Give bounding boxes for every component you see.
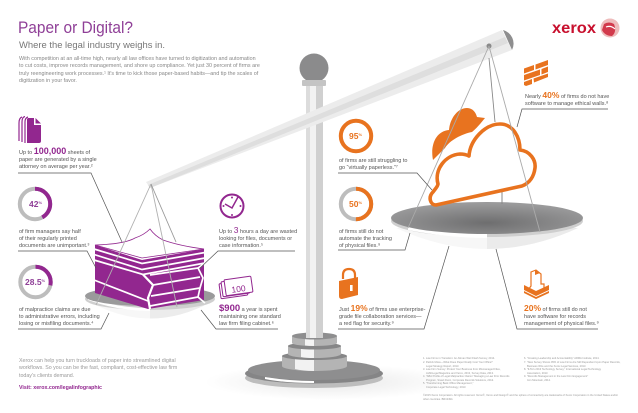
stat: firm managers: of their regularly printed [19, 236, 77, 242]
footnotes column two: Association, 2013. [527, 371, 548, 375]
intro text [19, 56, 260, 84]
stat: malpractice: of malpractice claims are due [19, 307, 91, 313]
intro text: With competition at an all-time high, nearly all law offices have turned to digitization and automation [19, 56, 256, 62]
callout lines [18, 109, 608, 329]
footnotes column one: ALM/Legal Magazine and Xerox, 2013, Survey Data, 2013. [426, 371, 494, 375]
footnotes column one: 4. "ABA Profile of Legal Malpractice Claims" Managing a Law Firm Records [423, 374, 510, 378]
stat: 900 dollars: maintaining one standard [219, 314, 281, 320]
stat: virtually paperless: go “virtually paperless.”⁷ [339, 164, 398, 171]
intro text: truly reengineering work processes.¹ It's time to kick those paper-based habits—and tip the scales of [19, 71, 259, 77]
donut: 28.5 percent: % [42, 278, 46, 283]
stat: malpractice [19, 307, 100, 327]
stat: 900 dollars: $900 a year is spent [219, 303, 278, 314]
footnotes column one: 3. Law Firm Survey: Protect Your Business from Mismanaged Files, [423, 367, 501, 371]
donut: 42 percent: 42 [29, 199, 38, 209]
intro text: to cut costs, improve records management, and shore up compliance. Yet just 30 percent of firms are [19, 63, 260, 69]
stat: 100,000 sheets [19, 146, 97, 170]
footnotes column one: Program, Stuart Dunn, Corporate Records Solutions, 2012. [426, 378, 494, 382]
donut: 42 percent: % [38, 200, 42, 205]
icon: lock [339, 269, 358, 299]
icon: money: 100 [231, 283, 246, 295]
stat: virtually paperless: of firms are still struggling to [339, 158, 407, 164]
donut: 50 percent: 50 [349, 199, 358, 209]
icon: money [219, 276, 253, 299]
donut: 28.5 percent: 28.5 [25, 277, 42, 287]
stat: 3 hours [219, 225, 297, 249]
footnotes column two: 8. "ILTA's 2013 Technology Survey," International Legal Technology [524, 367, 602, 371]
stat: 100,000 sheets: Up to 100,000 sheets of [19, 146, 91, 156]
floor shadow [205, 364, 455, 400]
stat: 20 percent: have software for records [524, 314, 586, 320]
donut: 28.5 percent [20, 267, 51, 297]
stat: 100,000 sheets: paper are generated by a single [19, 157, 97, 163]
stat: 19 percent: a red flag for security.⁹ [339, 320, 394, 327]
title: Paper or Digital? [18, 18, 133, 37]
icon: brick wall [524, 60, 548, 86]
footnotes column one: 2. Patrick Moss—What Does Paper Really Cost Your Office? [423, 360, 493, 364]
xerox logo [552, 18, 620, 38]
right pan strings [408, 46, 540, 232]
closing text: Xerox can help you turn truckloads of paper into streamlined digital [19, 358, 176, 364]
stat: 40 percent: software to manage ethical walls.⁸ [525, 100, 608, 107]
stat: 100,000 sheets: attorney on average per year.² [19, 164, 93, 170]
post [306, 84, 323, 338]
stat: 40 percent: Nearly 40% of firms do not have [525, 90, 609, 100]
footnotes column one: Corporate Legal Technology, 2013. [426, 385, 466, 389]
stat: 19 percent: grade file collaboration services— [339, 314, 422, 320]
footnotes column two: 9. "Records Management in the Law Firm Engagement" [524, 374, 588, 378]
stat: 3 hours: case information.⁵ [219, 242, 263, 249]
donut: 50 percent [341, 189, 371, 219]
xerox logo: xerox [552, 20, 596, 37]
stat: malpractice: to administrative errors, including [19, 314, 100, 320]
footnotes column two: 6. "Creating Leadership and Accountability" ARMA Institute, 2014. [524, 356, 600, 360]
icon: documents [19, 116, 41, 143]
stat: physical files tracking [339, 229, 392, 249]
stat: firm managers: documents are unimportant.³ [19, 243, 89, 249]
stat: 20 percent [524, 303, 599, 327]
stat: physical files tracking: of firms still do not [339, 229, 384, 235]
donut: 95 percent: % [358, 132, 362, 137]
base plate [245, 360, 383, 388]
icon: clock [220, 194, 244, 218]
link: Visit: xerox.com/legalinfographic [19, 385, 102, 391]
left pan strings [96, 184, 177, 307]
footnotes column two [524, 356, 621, 382]
stat: virtually paperless [339, 158, 407, 171]
footnotes column two: 7. "New Survey Shows 95% of Law Firms Are Still Dependent Upon Paper Records, [524, 360, 621, 364]
left pan [85, 290, 215, 318]
footnotes column two: Iron Mountain, 2012. [527, 378, 551, 382]
stat: physical files tracking: of physical files.⁹ [339, 242, 380, 249]
right pan [391, 202, 583, 249]
footnotes column one: 5. "Transforming Back Office Management," [423, 381, 474, 385]
closing text: today's clients demand. [19, 373, 74, 379]
closing text: workflows. So you can be the fast, compliant, cost-effective law firm [19, 365, 178, 371]
donut: 50 percent: % [358, 200, 362, 205]
stat: malpractice: losing or misfiling documents.⁴ [19, 320, 94, 327]
donut: 95 percent [341, 121, 371, 151]
stat: 900 dollars [219, 303, 281, 327]
stat: 3 hours: Up to 3 hours a day are wasted [219, 225, 297, 235]
stat: firm managers [19, 229, 89, 249]
stat: 900 dollars: law firm filing cabinet.⁶ [219, 320, 274, 327]
footnotes column one: 1. Law Firms in Transition: An Altman Weil Flash Survey, 2014. [423, 356, 495, 360]
top tier [292, 332, 337, 346]
paper stack icon [94, 229, 205, 309]
stat: 40 percent [525, 90, 609, 107]
copyright: other countries. BR13494. [423, 397, 453, 401]
stat: firm managers: of firm managers say half [19, 229, 81, 235]
footnotes column one: Legal Strategy Report, 2013. [426, 364, 459, 368]
stat: 19 percent [339, 303, 426, 327]
subtitle: Where the legal industry weighs in. [19, 40, 165, 51]
stat: 20 percent: management of physical files.⁹ [524, 320, 599, 327]
scale beam [146, 30, 514, 188]
footnotes column one [423, 356, 510, 389]
middle tier [288, 342, 341, 358]
stat: 19 percent: Just 19% of firms use enterprise- [339, 303, 426, 313]
bottom tier [282, 352, 347, 371]
cloud icon [430, 108, 535, 205]
closing text [19, 358, 178, 379]
icon: file box [524, 270, 549, 299]
donut: 42 percent [20, 189, 50, 219]
copyright [423, 393, 618, 401]
mid string behind cloud [501, 186, 503, 204]
intro text: digitization in your favor. [19, 78, 77, 84]
donut: 95 percent: 95 [349, 131, 358, 141]
copyright: ©2015 Xerox Corporation. All rights reserved. Xerox®, Xerox and Design® and the sphere of connectivity are trademarks of Xerox Corporation in the United States and/or [423, 393, 618, 397]
scale post and base [245, 54, 383, 388]
stat: physical files tracking: automate the tracking [339, 236, 392, 242]
footnotes column two: Business Wire and the Xerox Legal Services, 2013. [527, 364, 586, 368]
stat: 3 hours: looking for files, documents or [219, 236, 292, 242]
stat: 20 percent: 20% of firms still do not [524, 303, 587, 313]
